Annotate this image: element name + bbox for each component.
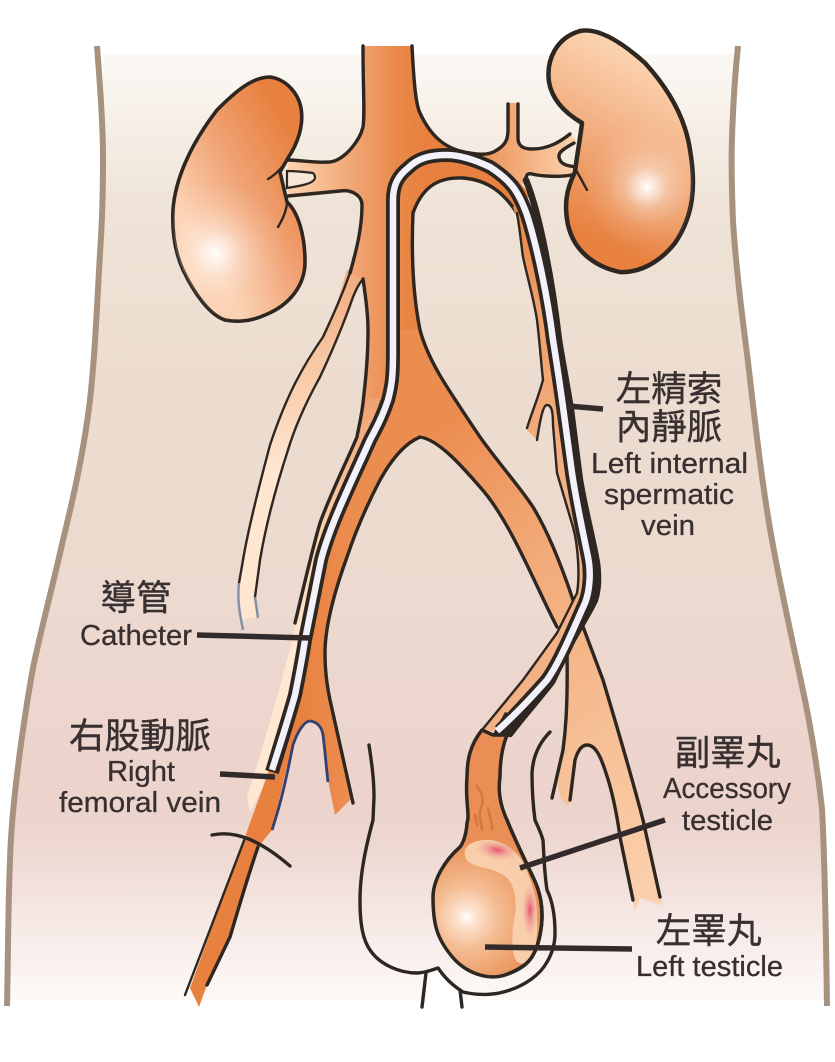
groin crease <box>212 834 290 866</box>
label: catheter: Catheter <box>80 620 192 652</box>
stem left edge <box>295 279 368 623</box>
red spot upper <box>474 837 520 863</box>
label: accessory testicle: testicle <box>682 805 773 837</box>
white gap between legs <box>422 968 462 1007</box>
veins on cord <box>475 786 492 830</box>
label: left testicle: 左睪丸 <box>656 911 762 951</box>
label: accessory testicle: 副睪丸 <box>675 733 781 773</box>
label: left internal spermatic vein: Left internal <box>591 448 748 480</box>
label: accessory testicle <box>520 733 791 868</box>
label: right femoral vein: Right <box>107 756 175 788</box>
inner arch outline <box>412 178 573 600</box>
left common femoral trunk <box>185 330 462 1007</box>
catheter <box>272 155 598 772</box>
red spot lower <box>522 882 538 938</box>
left spermatic vein outline <box>482 213 578 730</box>
body outline: right side <box>732 46 827 1006</box>
gonadal vein, right side <box>238 270 363 630</box>
label: accessory testicle: Accessory <box>663 773 791 805</box>
label: right femoral vein <box>59 716 275 819</box>
label: left internal spermatic vein: 左精索 <box>616 369 722 409</box>
icon: left kidney <box>548 30 693 272</box>
label: right femoral vein: 右股動脈 <box>69 716 211 756</box>
label: left testicle: Left testicle <box>636 951 783 983</box>
label: left testicle <box>485 911 783 983</box>
body outline: left side <box>7 46 103 1006</box>
label: left internal spermatic vein: 內靜脈 <box>616 407 722 447</box>
left renal vein <box>412 46 577 185</box>
label: catheter <box>80 578 310 652</box>
label: left internal spermatic vein: spermatic <box>604 479 734 511</box>
label: catheter: 導管 <box>100 578 172 618</box>
icon: right kidney <box>173 77 305 321</box>
label: left internal spermatic vein: vein <box>641 510 695 542</box>
scrotum and thigh outline <box>360 732 555 1007</box>
label: left internal spermatic vein <box>568 369 748 542</box>
right iliac vessel <box>400 320 662 912</box>
label: right femoral vein: femoral vein <box>59 787 221 819</box>
cream vessel along catheter <box>247 396 392 813</box>
aorta trunk and right renal vein <box>288 46 530 403</box>
left spermatic vein <box>482 200 588 732</box>
left testicle <box>433 730 542 977</box>
renal pelvis notch <box>287 171 315 188</box>
accessory testicle <box>465 840 537 964</box>
